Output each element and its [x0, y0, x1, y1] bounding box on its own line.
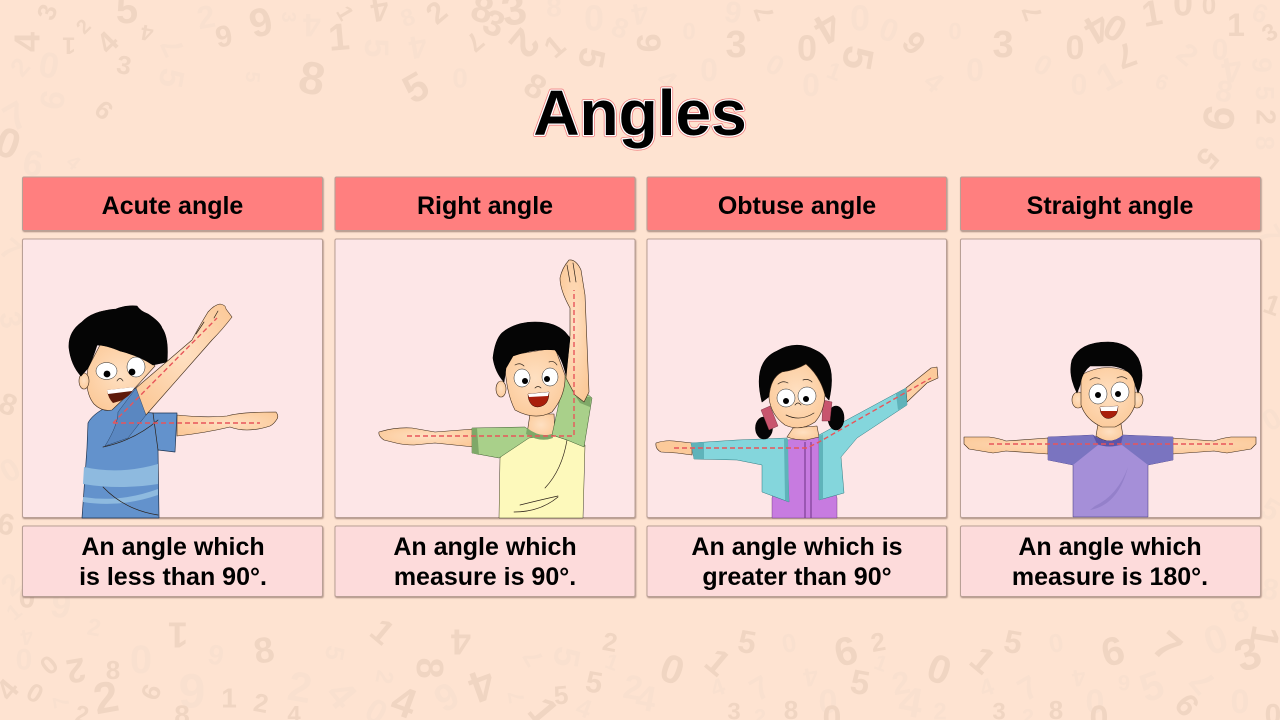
- background: scattered numbers: 8: [106, 655, 120, 685]
- background: scattered numbers: 5: [583, 665, 605, 701]
- mouth: [1100, 406, 1118, 418]
- background: scattered numbers: 0: [1071, 68, 1087, 102]
- heading: right angle: Right angle: [417, 192, 553, 220]
- background: scattered numbers: 2: [4, 52, 36, 82]
- dress: [772, 437, 837, 518]
- background: scattered numbers: 4: [138, 19, 155, 46]
- mouth: [107, 387, 135, 403]
- jacket: [691, 438, 789, 502]
- background: scattered numbers: 8: [295, 50, 329, 106]
- background: scattered numbers: 7: [460, 26, 490, 58]
- background: scattered numbers: 7: [155, 32, 191, 62]
- panel: obtuse angle: [647, 177, 946, 596]
- background: scattered numbers: 0: [1029, 48, 1057, 82]
- background: scattered numbers: 4: [918, 65, 950, 99]
- background: scattered numbers: 6: [830, 628, 862, 676]
- title: Angles: [533, 77, 747, 149]
- background: scattered numbers: 5: [151, 65, 191, 91]
- background: scattered numbers: 4: [806, 2, 850, 55]
- smile: [786, 413, 814, 418]
- heading: straight angle: Straight angle: [1027, 192, 1193, 220]
- background: scattered numbers: 6: [1152, 68, 1172, 96]
- background: scattered numbers: 8: [408, 657, 450, 679]
- caption: obtuse angle: greater than 90°: [702, 563, 892, 591]
- background: scattered numbers: 7: [747, 1, 781, 25]
- background: scattered numbers: 2: [72, 15, 96, 39]
- background: scattered numbers: 4: [406, 28, 430, 66]
- background: scattered numbers: 0: [761, 48, 789, 82]
- background: scattered numbers: 5: [357, 39, 395, 57]
- caption: right angle: An angle which: [393, 533, 577, 561]
- background: scattered numbers: 4: [317, 672, 365, 718]
- caption: straight angle: [960, 526, 1260, 596]
- background: scattered numbers: 9: [1118, 670, 1130, 696]
- background: scattered numbers: 0: [819, 683, 837, 720]
- background: scattered numbers: 5: [1134, 663, 1170, 711]
- background: scattered numbers: 2: [1170, 37, 1204, 73]
- background: scattered numbers: 1: [602, 648, 622, 676]
- mouth: [528, 392, 549, 407]
- shirt: [1048, 435, 1173, 517]
- background: scattered numbers: 5: [319, 643, 351, 663]
- yellow shirt body: [499, 435, 585, 518]
- panel: right angle: [335, 177, 635, 596]
- background: scattered numbers: 4: [1076, 3, 1118, 53]
- background: scattered numbers: 0: [36, 43, 62, 87]
- background: scattered numbers: 5: [545, 644, 589, 670]
- background: scattered numbers: 8: [397, 3, 419, 33]
- dashed angle lines: [407, 290, 574, 436]
- shirt sleeve shade: [105, 388, 146, 446]
- background: scattered numbers: 0: [1231, 683, 1249, 720]
- eyes: [777, 387, 816, 407]
- background: scattered numbers: 3: [1228, 628, 1268, 682]
- background: scattered numbers: 0: [1198, 616, 1234, 664]
- heading: right angle: [335, 177, 635, 230]
- background: scattered numbers: 2: [620, 668, 646, 708]
- background: scattered numbers: 1: [538, 29, 572, 65]
- background: scattered numbers: 4: [462, 658, 502, 712]
- background: scattered numbers: 0: [779, 627, 799, 659]
- ears: [1072, 392, 1143, 408]
- caption: obtuse angle: [647, 526, 946, 596]
- raised arm: [560, 260, 589, 402]
- hair: [69, 306, 167, 376]
- background: scattered numbers: 9: [213, 19, 235, 55]
- background: scattered numbers: 2: [600, 626, 620, 658]
- background: scattered numbers: 8: [1227, 594, 1253, 630]
- background: scattered numbers: 5: [1001, 623, 1025, 661]
- background: scattered numbers: 9: [206, 638, 226, 672]
- background: scattered numbers: 2: [251, 687, 271, 719]
- background: scattered numbers: 1: [1227, 7, 1245, 43]
- background: scattered numbers: 4: [976, 673, 998, 703]
- caption: right angle: [335, 526, 635, 596]
- background: scattered numbers: 1: [962, 638, 1004, 682]
- background: scattered numbers: 7: [516, 644, 550, 672]
- background: scattered numbers: 5: [570, 45, 614, 71]
- background: scattered numbers: 0: [874, 10, 904, 50]
- image card: boy with right arm angle: [335, 239, 635, 518]
- background: scattered numbers: 1: [168, 614, 188, 656]
- background: scattered numbers: 7: [503, 689, 529, 705]
- background: scattered numbers: 4: [1219, 48, 1245, 92]
- hair back: [759, 345, 832, 402]
- background: scattered numbers: 0: [802, 67, 820, 103]
- background: scattered numbers: 0: [966, 52, 984, 88]
- dashed angle lines: [674, 378, 931, 448]
- background: scattered numbers: 0: [1046, 627, 1066, 659]
- hands: [656, 367, 938, 455]
- background: scattered numbers: 4: [303, 7, 321, 43]
- raised arm: [136, 304, 232, 415]
- neck: [1096, 424, 1123, 441]
- background: scattered numbers: 1: [1089, 54, 1129, 100]
- caption: obtuse angle: An angle which is: [691, 533, 903, 561]
- background: scattered numbers: 8: [251, 628, 277, 672]
- background: scattered numbers: 9: [895, 24, 933, 62]
- background: scattered numbers: 0: [700, 52, 718, 88]
- background: scattered numbers: 4: [801, 661, 821, 693]
- background: scattered numbers: 8: [607, 11, 633, 45]
- background: scattered numbers: 5: [847, 663, 873, 703]
- background: scattered numbers: 7: [743, 668, 777, 708]
- dashed angle lines: [113, 318, 260, 423]
- background: scattered numbers: 5: [241, 70, 263, 84]
- background: scattered numbers: 0: [1212, 34, 1228, 66]
- background: scattered numbers: 0: [452, 62, 468, 94]
- background: scattered numbers: 2: [500, 20, 548, 66]
- background: scattered numbers: 5: [1189, 141, 1225, 175]
- horizontal arm: [177, 412, 278, 436]
- background: scattered numbers: 7: [1011, 668, 1045, 708]
- background: scattered numbers: 7: [1144, 623, 1190, 671]
- background: scattered numbers: 3: [277, 11, 299, 23]
- scrunchies: [761, 400, 832, 430]
- pigtails: [756, 406, 844, 439]
- background: scattered numbers: 0: [19, 582, 35, 614]
- background: scattered numbers: 8: [1250, 136, 1280, 150]
- background: scattered numbers: 2: [85, 614, 103, 642]
- title: Angles: [533, 77, 747, 149]
- background: scattered numbers: 9: [48, 583, 74, 627]
- panel: straight angle: [960, 177, 1260, 596]
- horizontal arm: [379, 428, 474, 447]
- background: scattered numbers: 6: [1097, 628, 1129, 676]
- background: scattered numbers: 2: [370, 668, 398, 686]
- neck: [787, 426, 819, 440]
- background: scattered numbers: 7: [1015, 1, 1049, 25]
- background: scattered numbers: 1: [871, 649, 891, 677]
- background: scattered numbers: 1: [823, 57, 845, 87]
- caption: acute angle: [22, 526, 322, 596]
- face: [769, 364, 825, 428]
- background: scattered numbers: 5: [1250, 86, 1280, 100]
- green sleeve: [472, 375, 592, 458]
- background: scattered numbers: 0: [921, 646, 957, 694]
- image card: girl with obtuse arm angle: [647, 239, 946, 518]
- background: scattered numbers: 1: [327, 16, 351, 60]
- background: scattered numbers: 2: [868, 626, 888, 658]
- background: scattered numbers: 1: [1, 598, 27, 626]
- background: scattered numbers: 9: [1246, 57, 1278, 73]
- background: scattered numbers: 1: [331, 1, 359, 25]
- background: scattered numbers: 3: [114, 49, 134, 81]
- background: scattered numbers: 4: [62, 151, 85, 176]
- heading: straight angle: [960, 177, 1260, 230]
- eyes: [1089, 382, 1129, 404]
- background: scattered numbers: 4: [451, 622, 471, 662]
- background: scattered numbers: 2: [284, 662, 316, 712]
- background: scattered numbers: 3: [478, 0, 510, 46]
- head: [1081, 368, 1135, 427]
- background: scattered numbers: 1: [363, 611, 401, 653]
- background: scattered numbers: 5: [735, 623, 759, 661]
- heading: acute angle: Acute angle: [102, 192, 243, 220]
- heading: obtuse angle: Obtuse angle: [718, 192, 876, 220]
- background: scattered numbers: 6: [89, 94, 119, 126]
- background: scattered numbers: 3: [992, 24, 1014, 66]
- caption: straight angle: measure is 180°.: [1012, 563, 1208, 591]
- eyes: [96, 357, 145, 380]
- background: scattered numbers: 8: [517, 66, 553, 108]
- caption: acute angle: An angle which: [81, 533, 265, 561]
- background: scattered numbers: 0: [16, 644, 32, 676]
- shirt: [82, 388, 177, 518]
- image card: boy with straight arm angle: [960, 239, 1260, 518]
- background: scattered numbers: 0: [1086, 683, 1104, 720]
- background: scattered numbers: 0: [130, 638, 152, 682]
- background: scattered numbers: 4: [90, 25, 126, 61]
- background: scattered numbers: 0: [34, 649, 64, 681]
- heading: obtuse angle: [647, 177, 946, 230]
- background: scattered numbers: 0: [797, 28, 817, 68]
- background: scattered numbers: 9: [1192, 102, 1244, 134]
- background: scattered numbers: 3: [30, 0, 64, 24]
- background: scattered numbers: 1: [221, 682, 237, 714]
- background: scattered numbers: 9: [179, 666, 205, 718]
- background: scattered numbers: 0: [21, 676, 49, 710]
- background: scattered numbers: 5: [833, 42, 883, 74]
- hair: [1071, 342, 1142, 393]
- background: scattered numbers: 7: [1182, 663, 1224, 701]
- background: scattered numbers: 2: [889, 664, 913, 702]
- background: scattered numbers: 4: [633, 676, 659, 720]
- dashed angle line: [989, 443, 1233, 445]
- background: scattered numbers: 9: [629, 34, 667, 52]
- arms: [964, 437, 1256, 454]
- background: scattered numbers: 0: [948, 18, 962, 46]
- caption: right angle: measure is 90°.: [394, 563, 576, 591]
- background: scattered numbers: 0: [654, 646, 690, 694]
- eyes: [514, 368, 558, 387]
- background: scattered numbers: 6: [20, 141, 46, 185]
- background: scattered numbers: 4: [651, 63, 683, 97]
- hair: [493, 322, 570, 382]
- background: scattered numbers: 4: [6, 32, 48, 52]
- background: scattered numbers: 3: [725, 24, 747, 66]
- background: scattered numbers: 6: [33, 87, 73, 113]
- background: scattered numbers: 2: [63, 650, 89, 690]
- ear: [496, 381, 506, 397]
- image card: boy with acute arm angle: [22, 239, 322, 518]
- background: scattered numbers: 4: [707, 673, 729, 703]
- neck: [527, 414, 555, 438]
- background: scattered numbers: 4: [1069, 663, 1088, 692]
- background: scattered numbers: 1: [697, 640, 739, 684]
- head: [87, 345, 155, 410]
- head: [505, 348, 565, 416]
- background: scattered numbers: 8: [1213, 74, 1235, 110]
- ear: [79, 373, 89, 389]
- caption: straight angle: An angle which: [1018, 533, 1202, 561]
- background: scattered numbers: 1: [62, 32, 76, 58]
- caption: acute angle: is less than 90°.: [79, 563, 267, 591]
- background: scattered numbers: 7: [1111, 34, 1141, 76]
- background: scattered numbers: 9: [245, 0, 277, 47]
- background: scattered numbers: 0: [1066, 29, 1084, 67]
- background: scattered numbers: 6: [134, 680, 168, 704]
- background: scattered numbers: 0: [1096, 5, 1134, 51]
- background: scattered numbers: 5: [552, 679, 570, 711]
- background: scattered numbers: 0: [682, 18, 696, 46]
- panel: acute angle: [22, 177, 322, 596]
- background: scattered numbers: 4: [18, 624, 35, 651]
- heading: acute angle: [22, 177, 322, 230]
- background: scattered numbers: 7: [48, 694, 74, 710]
- background: scattered numbers: 5: [395, 63, 437, 113]
